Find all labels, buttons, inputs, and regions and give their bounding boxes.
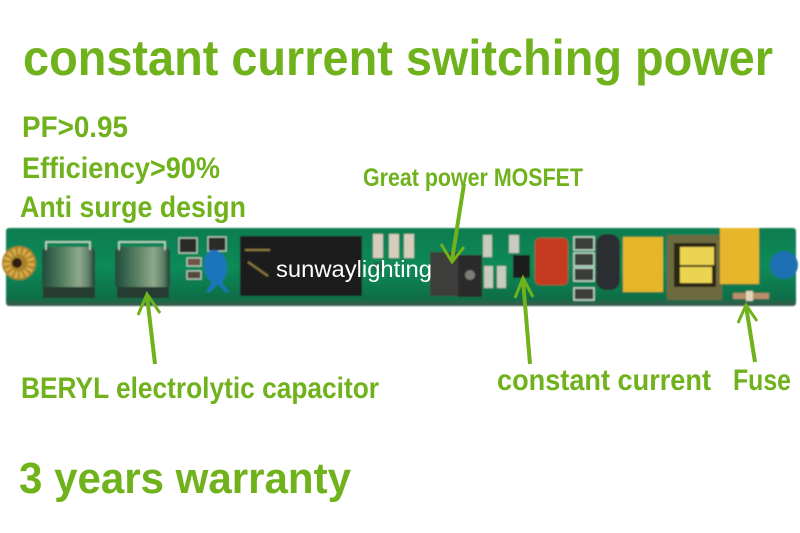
- yellow capacitor 1: [623, 237, 663, 292]
- fuse: [733, 291, 769, 301]
- label: capacitor: BERYL electrolytic capacitor: [21, 372, 379, 405]
- watermark: sunwaylighting: [276, 256, 432, 282]
- arrow: fuse: [738, 305, 757, 362]
- capacitor 1: [42, 242, 95, 298]
- resistor array: [373, 234, 414, 272]
- spec list: [20, 111, 246, 224]
- MOSFET: [430, 252, 482, 297]
- circuit board: [2, 228, 798, 306]
- diodes: [574, 237, 594, 300]
- common mode choke: [667, 235, 722, 300]
- IC chip: [513, 255, 530, 278]
- black inductor: [596, 234, 620, 290]
- blue capacitor right: [770, 251, 798, 279]
- blue disc capacitor: [204, 250, 229, 292]
- red capacitor: [535, 238, 568, 285]
- transformer: [240, 236, 362, 296]
- spec: efficiency: Efficiency>90%: [22, 152, 220, 185]
- label: MOSFET: Great power MOSFET: [363, 164, 583, 192]
- spec: anti surge: Anti surge design: [20, 191, 246, 224]
- arrow: constant current: [515, 278, 533, 364]
- toroid coil: [2, 246, 36, 280]
- arrow: MOSFET: [441, 184, 464, 262]
- yellow capacitor 2: [720, 228, 759, 284]
- spec: power factor: PF>0.95: [22, 111, 128, 144]
- pads and IC: [483, 235, 519, 288]
- label: constant current: constant current: [497, 364, 711, 397]
- small components: [179, 237, 226, 279]
- arrow: capacitor: [138, 294, 160, 364]
- capacitor 2: [115, 242, 170, 298]
- title: constant current switching power: [23, 30, 773, 86]
- warranty: 3 years warranty: [19, 454, 352, 503]
